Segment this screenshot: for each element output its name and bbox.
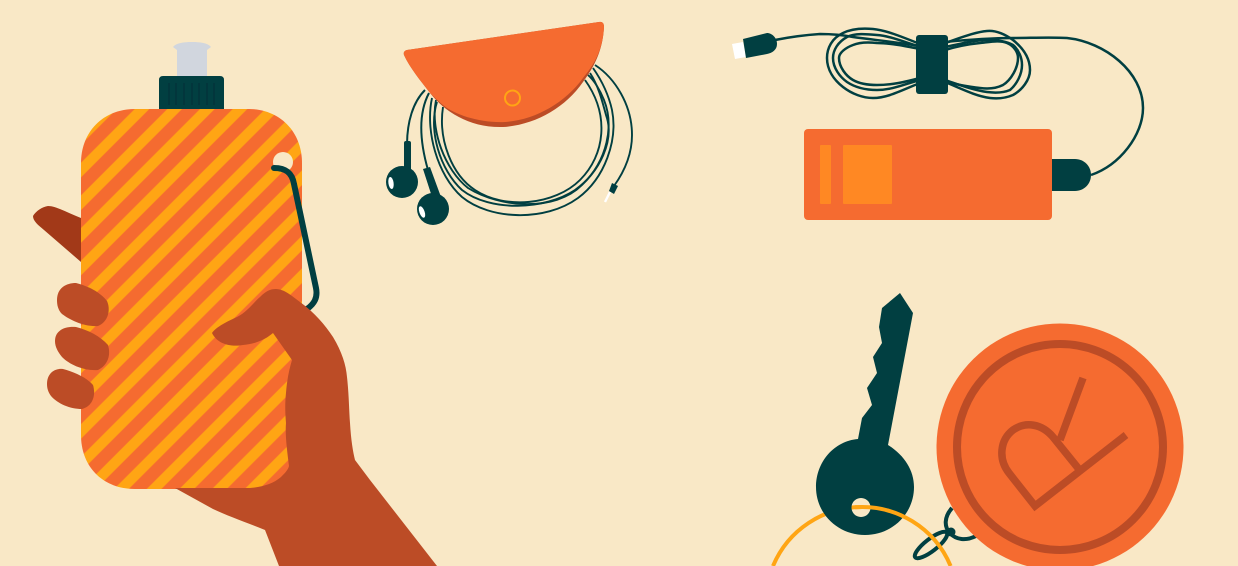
- icon: key ring front arc: [855, 507, 951, 566]
- icon: carabiner clip: [274, 168, 317, 309]
- icon: key ring left arc: [773, 507, 862, 566]
- left earbud: [386, 141, 418, 198]
- finger one: [57, 283, 109, 326]
- bottle body: [81, 109, 302, 489]
- icon: hand holding bottle: [47, 283, 437, 566]
- audio jack: [605, 183, 618, 202]
- finger two: [55, 327, 109, 370]
- icon: far finger behind bottle: [33, 206, 81, 262]
- bottle cap: [159, 76, 224, 109]
- pouch snap: [505, 90, 520, 106]
- icon: earbuds with cord: [386, 65, 632, 225]
- coiled cord: [407, 65, 632, 215]
- cable: [775, 29, 1143, 175]
- icon: round tag with logo: [937, 323, 1184, 566]
- brick body: [804, 129, 1052, 220]
- icon: power brick: [804, 129, 1091, 220]
- icon: charger cable bundle: [732, 29, 1143, 175]
- wire to left earbud: [407, 90, 425, 145]
- tag logo: [1002, 378, 1126, 506]
- usb plug: [743, 33, 777, 58]
- bottle nozzle: [173, 42, 211, 76]
- tag disc: [937, 323, 1184, 566]
- right earbud: [417, 167, 449, 225]
- wire to right earbud: [421, 93, 429, 170]
- jack wire: [595, 65, 632, 186]
- brick plug: [1052, 159, 1091, 191]
- finger three: [47, 369, 94, 409]
- brick label square: [843, 145, 892, 204]
- icon: semicircular cord pouch: [404, 22, 604, 127]
- pouch shadow: [404, 22, 604, 127]
- icon: key: [816, 293, 914, 535]
- tag inner ring: [957, 344, 1163, 550]
- brick label strip: [820, 145, 831, 204]
- icon: water bottle: [81, 42, 302, 489]
- cable strap: [916, 35, 948, 94]
- hand and thumb: [175, 289, 437, 566]
- bottle hole: [273, 152, 293, 172]
- bottle cap ribs: [169, 83, 214, 105]
- usb plug tip: [732, 42, 746, 59]
- icon: small chain links: [912, 508, 976, 562]
- pouch flap: [404, 22, 604, 122]
